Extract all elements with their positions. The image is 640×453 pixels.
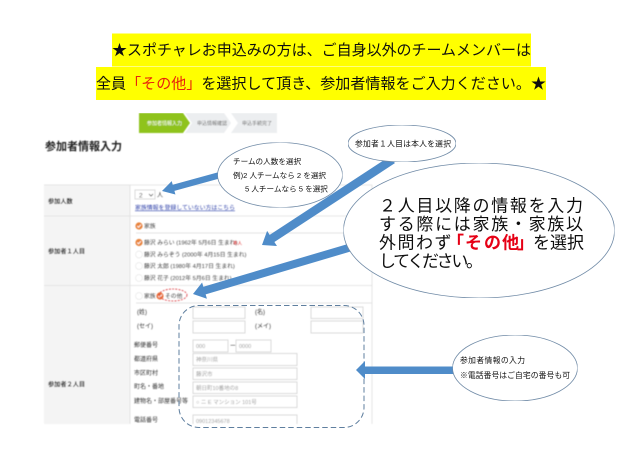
callout: enter participant info: 参加者情報の入力	[460, 355, 525, 365]
family registration link: 家族情報を登録していない方はこちら	[135, 204, 235, 212]
form table	[44, 185, 372, 427]
arrow: to input fields	[356, 361, 455, 379]
title banner: ★スポチャレお申込みの方は、ご自身以外のチームメンバーは	[112, 42, 531, 59]
row label: participant 2: 参加者２人目	[48, 380, 85, 388]
address fields: ー	[230, 344, 236, 350]
callout: select その他: 「その他」	[447, 234, 534, 252]
screenshot: application form	[40, 113, 380, 436]
address fields: ○ ニ E マンション 101号	[196, 399, 257, 406]
name fields: (メイ)	[255, 324, 271, 330]
arrow: to participant 1	[257, 152, 397, 253]
name fields: (名)	[255, 308, 265, 316]
title banner: 全員「その他」を選択して頂き、参加者情報をご入力ください。★	[96, 76, 546, 92]
address fields: 藤沢市	[196, 370, 213, 378]
step indicator: 参加者情報入力	[147, 120, 182, 127]
callout: participant 1 is self: 参加者１人目は本人を選択	[355, 138, 451, 148]
address fields: 市区町村	[134, 369, 158, 377]
address fields: 郵便番号	[134, 341, 158, 349]
callout: participant 1 is self	[348, 125, 456, 162]
address fields: 神奈川県	[196, 356, 219, 364]
callout: select その他: してください。	[379, 252, 483, 271]
address fields	[134, 340, 297, 427]
dashed frame around input fields	[179, 306, 364, 428]
callout: team size: チームの人数を選択	[233, 156, 302, 166]
form heading: 参加者情報入力	[45, 139, 122, 153]
callout: enter participant info: ※電話番号はご自宅の番号も可	[460, 370, 570, 380]
address fields: 09012345678	[196, 419, 230, 425]
name fields: (セイ)	[137, 323, 153, 330]
participant 1 choices	[135, 222, 247, 282]
address fields: 電話番号	[134, 417, 158, 424]
participant 2 type choice: その他	[165, 292, 183, 300]
number select: 人	[157, 192, 163, 199]
callout: select その他: を選択	[533, 234, 584, 252]
address fields: 0000	[239, 344, 251, 350]
callout: team size	[218, 142, 342, 208]
step indicator: 申込手続完了	[242, 120, 272, 127]
participant 1 choices: 藤沢 太郎 (1980年 4月17日 生まれ)	[144, 262, 235, 270]
address fields: 町名・番地	[134, 382, 164, 390]
callout: enter participant info	[452, 335, 578, 401]
name fields	[137, 307, 363, 333]
number select	[135, 190, 163, 200]
callout: select その他: 外問わず	[379, 234, 452, 252]
participant 1 choices: 藤沢 みらい (1962年 5月6日 生まれ)	[144, 238, 237, 246]
arrow: to number select	[160, 168, 224, 198]
participant 1 choices: 本人	[233, 240, 242, 246]
participant 2 type choice: 家族	[144, 292, 156, 300]
participant 1 choices: 藤沢 花子 (2012年 5月6日 生まれ)	[144, 274, 232, 282]
step indicator	[139, 113, 277, 133]
step indicator: 申込情報確認	[197, 120, 227, 127]
row label: number of participants: 参加人数	[48, 198, 74, 206]
address fields: 000	[196, 344, 205, 350]
number select: 2	[139, 192, 143, 200]
address fields: 朝日町10番地の8	[196, 384, 238, 392]
participant 2 type choice	[136, 289, 187, 301]
address fields: 建物名・部屋番号等	[134, 397, 188, 405]
callout: team size: 例)2 人チームなら 2 を選択	[233, 170, 326, 180]
participant 1 choices: 家族	[144, 222, 156, 230]
name fields: (姓)	[137, 308, 147, 316]
participant 1 choices: 藤沢 みらぞう (2000年 4月15日 生まれ)	[144, 250, 247, 258]
crop mask below screenshot	[40, 424, 380, 436]
title banner	[96, 34, 546, 100]
address fields: 都道府県	[134, 355, 158, 363]
callout: select その他: ２人目以降の情報を入力	[379, 196, 583, 216]
callout: team size: 5 人チームなら 5 を選択	[245, 184, 328, 194]
row label: participant 1: 参加者１人目	[48, 248, 85, 256]
callout: select その他	[344, 163, 614, 298]
callout: select その他: する際には家族・家族以	[379, 215, 583, 234]
arrow: to その他 choice	[191, 238, 356, 302]
